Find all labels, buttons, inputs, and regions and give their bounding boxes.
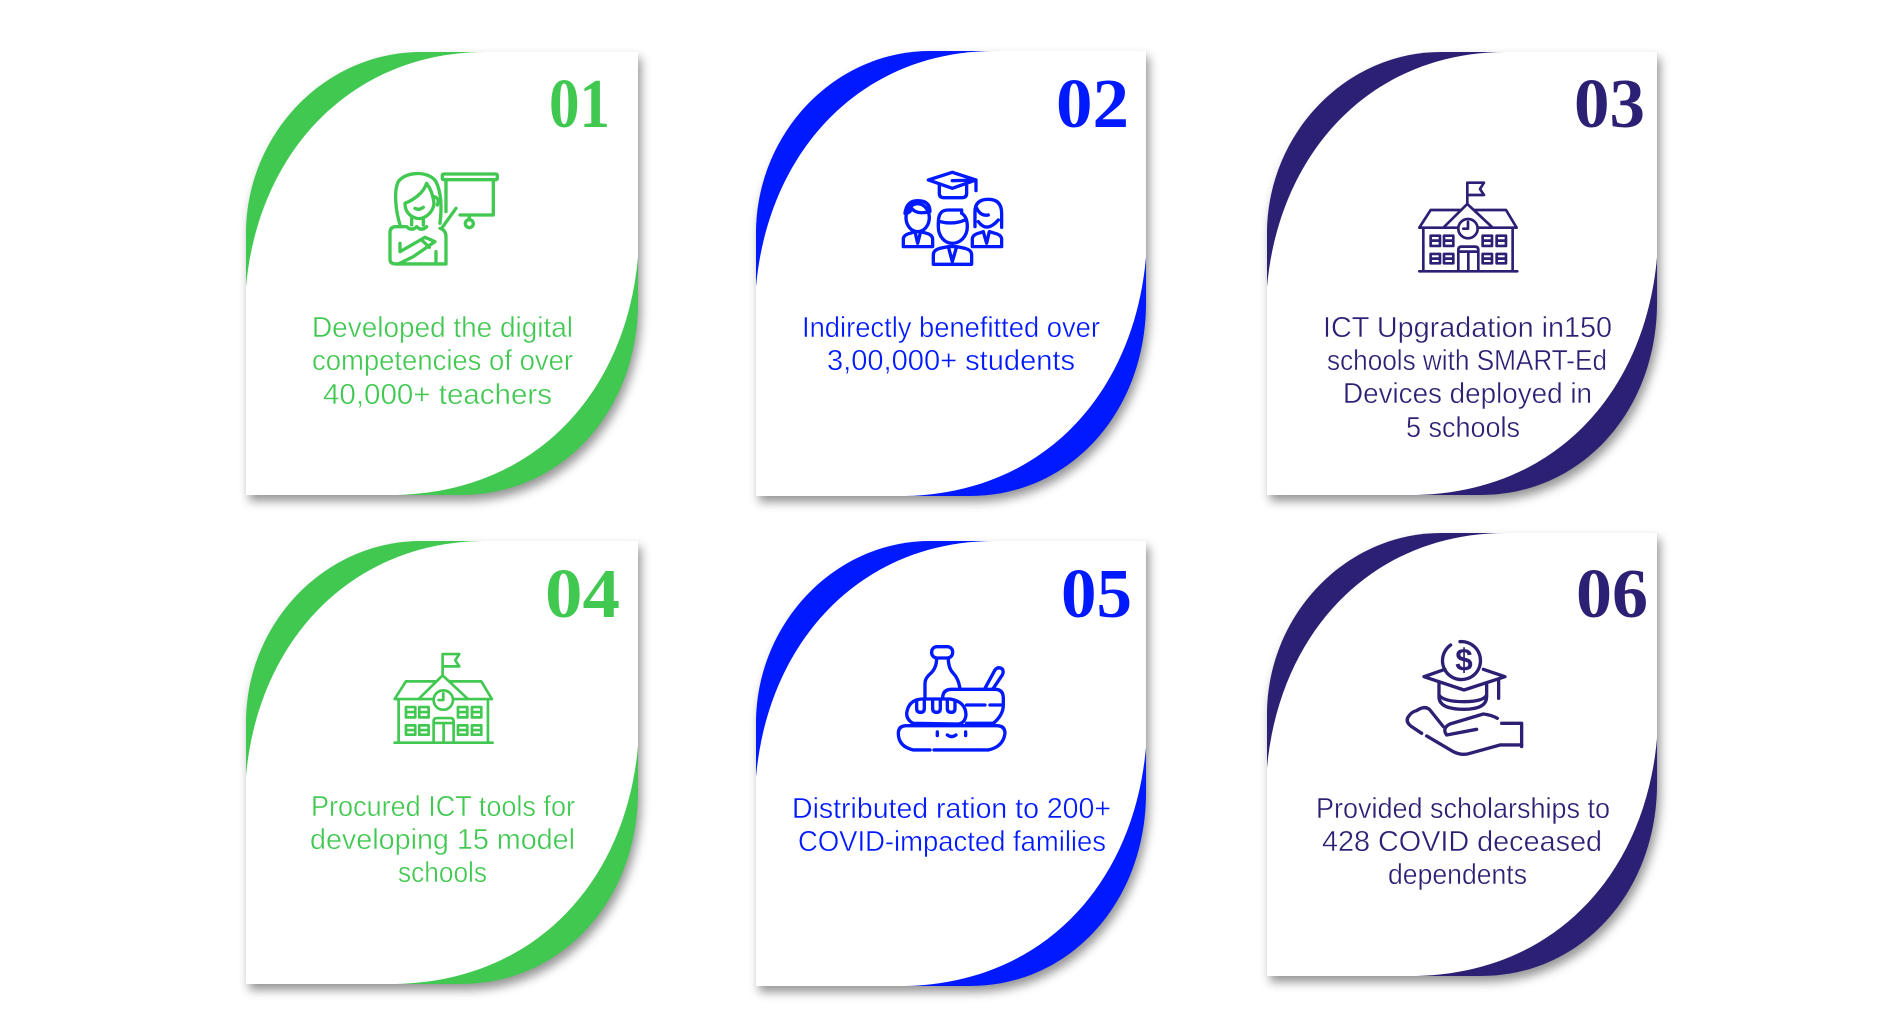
panel: card 05 <box>756 541 1146 986</box>
number 02: 02 <box>1056 66 1129 143</box>
description 06: Provided scholarships to <box>1316 793 1610 825</box>
description 01: 40,000+ teachers <box>323 379 552 411</box>
leaf shape card 02 <box>756 51 1146 496</box>
leaf shape card 04 <box>246 541 638 984</box>
description 03 <box>1323 312 1612 444</box>
panel: card 03 <box>1267 52 1657 495</box>
description 04 <box>310 791 575 889</box>
icon: food ration <box>898 647 1005 750</box>
description 04: Procured ICT tools for <box>311 791 575 823</box>
icon: teacher at board <box>390 174 497 264</box>
number 03: 03 <box>1574 66 1645 143</box>
leaf shape card 06 <box>1267 533 1657 976</box>
description 04: schools <box>398 857 487 889</box>
panel: card 01 <box>246 52 638 495</box>
icon: school building <box>1419 183 1517 271</box>
leaf shape card 03 <box>1267 52 1657 495</box>
description 03: Devices deployed in <box>1343 378 1592 410</box>
icon: hand with cap and coin <box>1407 642 1522 754</box>
number 04: 04 <box>545 556 620 633</box>
description 05: Distributed ration to 200+ <box>792 793 1111 825</box>
description 03: 5 schools <box>1406 412 1520 444</box>
leaf shape card 05 <box>756 541 1146 986</box>
description 05: COVID-impacted families <box>798 826 1106 858</box>
description 06 <box>1316 793 1610 891</box>
description 01: Developed the digital <box>312 312 573 344</box>
description 02 <box>802 312 1100 377</box>
description 04: developing 15 model <box>310 824 575 856</box>
description 06: 428 COVID deceased <box>1322 826 1602 858</box>
description 03: schools with SMART-Ed <box>1327 345 1607 377</box>
panel: card 02 <box>756 51 1146 496</box>
description 01: competencies of over <box>312 345 573 377</box>
description 03: ICT Upgradation in150 <box>1323 312 1612 344</box>
icon: school building <box>395 654 493 743</box>
panel: card 06 <box>1267 533 1657 976</box>
leaf shape card 01 <box>246 52 638 495</box>
description 06: dependents <box>1388 859 1527 891</box>
number 06: 06 <box>1576 556 1648 633</box>
description 02: 3,00,000+ students <box>827 345 1075 377</box>
icon: hand with cap and coin: $ <box>1455 643 1473 678</box>
description 02: Indirectly benefitted over <box>802 312 1100 344</box>
description 01 <box>312 312 573 411</box>
panel: card 04 <box>246 541 638 984</box>
number 01: 01 <box>549 66 610 143</box>
icon: graduates under cap <box>903 172 1002 264</box>
description 05 <box>792 793 1111 858</box>
number 05: 05 <box>1061 556 1132 633</box>
